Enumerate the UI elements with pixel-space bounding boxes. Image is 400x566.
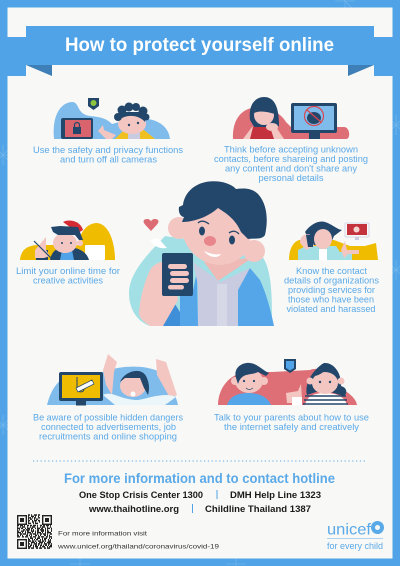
visit information: www.unicef.org/thailand/coronavirus/covid-19 [57,544,219,550]
text: know the contacts [284,266,379,314]
hotline contacts: www.thaihotline.org [88,503,179,514]
text: know the contacts: Know the contact [296,266,367,276]
visit information: For more information visit [58,530,147,538]
text: talk to parents [214,412,369,432]
hotline contacts: Childline Thailand 1387 [205,503,311,514]
illustration: creative activities [20,221,115,260]
unicef logo: for every child [327,541,383,552]
unicef logo [327,521,384,552]
text: safety and privacy [33,145,183,164]
text: creative activities: Limit your online time for [16,266,120,276]
text: creative activities [16,266,120,286]
illustration: hidden dangers [47,354,178,406]
text: know the contacts: details of organizations [284,276,379,286]
unicef logo: unicef [327,522,372,538]
title banner [0,26,400,76]
text: talk to parents: the internet safely and creatively [224,422,359,432]
text: know the contacts: providing services for [288,285,375,295]
text: think before sharing: Think before accepting unknown [224,144,358,154]
text: hidden dangers: recruitments and online shopping [39,432,177,442]
hair [179,181,267,239]
text: know the contacts: those who have been [288,294,374,304]
text: think before sharing: personal details [258,173,324,183]
illustration: main character with phone [129,181,274,326]
hotline contacts [79,489,321,514]
title: How to protect yourself online [65,35,334,56]
hotline heading: For more information and to contact hotline [64,471,335,486]
hotline contacts: One Stop Crisis Center 1300 [79,489,203,500]
text: talk to parents: Talk to your parents about how to use [214,412,369,422]
icon: heart [144,219,158,231]
text: hidden dangers: Be aware of possible hidden dangers [33,412,183,422]
text: think before sharing [214,144,368,183]
text: hidden dangers [33,412,183,442]
text: safety and privacy: Use the safety and privacy functions [33,145,183,155]
QR code [17,515,52,548]
illustration: think before sharing [233,97,349,139]
text: think before sharing: any content and don't share any [225,164,357,174]
text: hidden dangers: connected to advertisements, job [41,422,176,432]
text: safety and privacy: and turn off all cameras [60,154,157,164]
visit information [57,530,219,550]
illustration: talk to parents [218,359,357,405]
text: know the contacts: violated and harassed [286,304,376,314]
illustration: know the contacts [289,222,378,260]
text: think before sharing: contacts, before shareing and posting [214,154,368,164]
illustration: safety and privacy [54,98,170,139]
text: creative activities: creative activities [33,276,103,286]
hotline contacts: DMH Help Line 1323 [230,489,321,500]
